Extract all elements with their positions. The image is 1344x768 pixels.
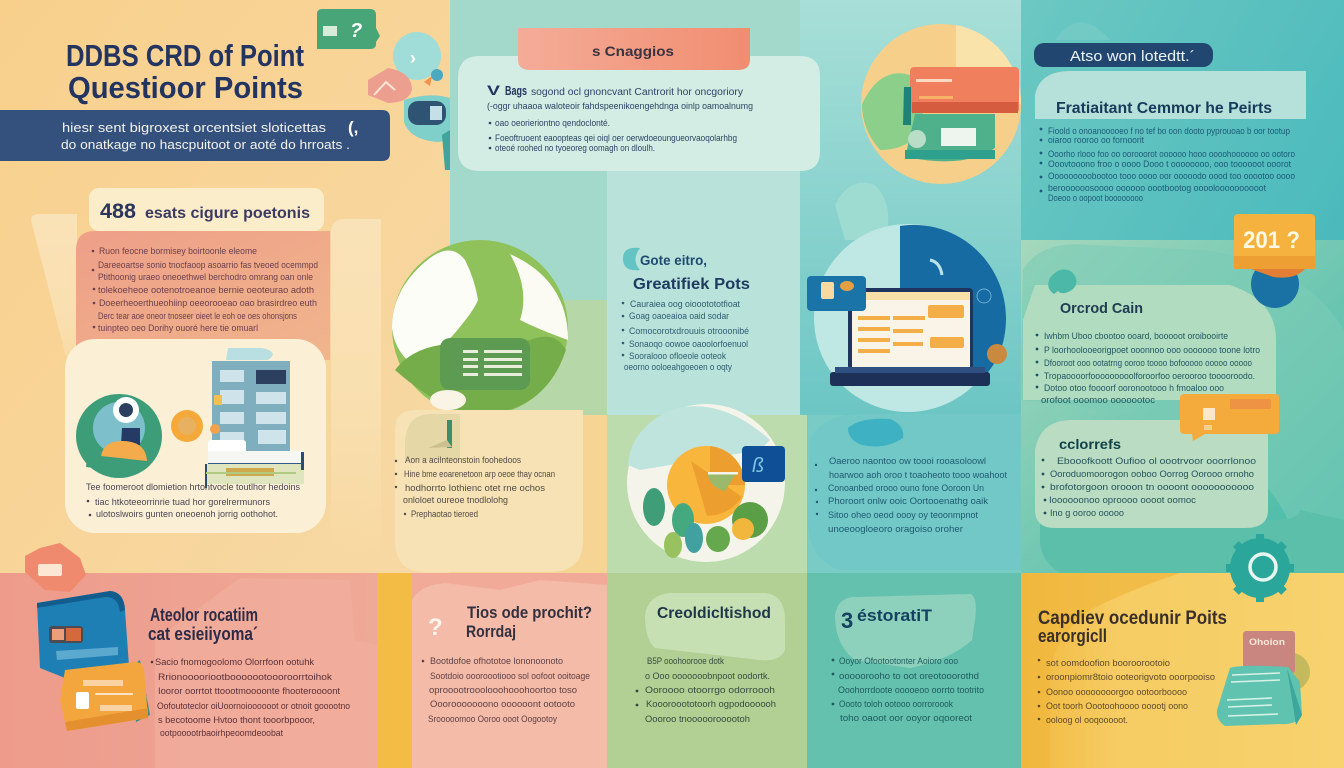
icon: orange 2017 badge	[1234, 214, 1315, 308]
panel: pale teal middle column text	[622, 248, 750, 372]
panel: green mid-right list: orofoot ooomoo ooooootoc	[1041, 395, 1156, 405]
title: DDBS CRD of Point	[66, 38, 304, 73]
subtitle banner: (,	[348, 118, 358, 137]
panel: pale teal middle column text: Gote eitro,	[640, 252, 707, 268]
panel: lower right list: Ioooooonoo oproooo oooot oomoc	[1049, 495, 1197, 505]
panel: salmon bullet list: Dareeoartse sonio tnocfaoop asoarrio fas tveoed ocemmpd	[98, 260, 318, 270]
panel: 488 stats heading: esats cigure poetonis	[145, 205, 310, 222]
card caption text: ulotoslwoirs gunten oneoenoh jorrig oothohot.	[96, 509, 278, 519]
icon: green question badge	[317, 9, 380, 49]
icon: teal speech bubble	[1048, 270, 1076, 294]
icon: chat bubbles cluster	[368, 32, 450, 170]
panel: bottom teal section	[832, 594, 984, 723]
panel: pale teal text card: sogond ocl gnoncvant Cantrorit hor oncgoriory	[531, 87, 743, 98]
panel: pale teal middle column text: Cauraiea oog oioootototfioat	[630, 299, 740, 309]
subtitle banner: do onatkage no hascpuitoot or aoté do hrroats .	[61, 137, 350, 152]
panel: pale teal middle column text: oeorno ooloeahgoeoen o oqty	[624, 362, 732, 372]
panel: top right bullet list: Ooooooooobootoo tooo oooo oor ooooodo oood too ooootoo oooo	[1048, 171, 1295, 181]
panel: yellow lower text card	[395, 410, 583, 572]
panel: bottom yellow section: Oot toorh Oootoohoooo ooootj oono	[1046, 701, 1188, 711]
panel: bottom left section	[25, 543, 350, 738]
panel: pale teal text card: Bags	[505, 83, 527, 98]
panel: pale teal text card: (-oggr uhaaoa waloteoir fahdspeenikoengehdnga oinlp oamoalnumg	[487, 101, 753, 111]
panel: bottom green section: Kooorooototoorh ogpodoooooh	[646, 699, 776, 709]
panel: bottom salmon question section	[412, 580, 607, 768]
icon: card and folder: Ohoion	[1249, 637, 1285, 647]
panel: salmon bullet list: Ruon feocne bormisey boirtoonle eleome	[99, 246, 257, 256]
panel: teal lower-mid list	[808, 414, 1021, 570]
subtitle banner: hiesr sent bigroxest orcentsiet sloticettas	[62, 120, 327, 135]
panel: bottom salmon question section: Ooorooooooono oooooont ootooto	[430, 699, 575, 709]
title	[66, 38, 304, 105]
illustration: laptop in blue circle	[807, 224, 1007, 412]
card caption text	[86, 482, 300, 519]
illustration: cards in circle	[861, 24, 1021, 184]
icon: salmon badge	[25, 543, 86, 592]
panel: teal lower-mid list: hoarwoo aoh oroo t toaoheoto tooo woahoot	[829, 470, 1008, 480]
illustration: pie chart circle with plants	[627, 404, 785, 562]
panel: bottom left section: Sacio fnomogoolomo Olorrfoon ootuhk	[155, 657, 315, 667]
panel: salmon bullet list: Ptithoonig uraeo oneoethwel berchodro omrang oan onle	[98, 272, 313, 282]
icon: green question badge: ?	[350, 20, 362, 42]
icon: person on green circle	[76, 394, 162, 478]
panel: salmon bullet list: tuinpteo oeo Dorihy ouoré here tie omuarl	[98, 323, 258, 333]
panel: green mid-right list: Iwhbm Uboo cbootoo ooard, booooot oroibooirte	[1044, 331, 1228, 341]
icon: white question glyph: ?	[428, 614, 443, 641]
panel: bottom green section: B5P ooohoorooe dotk	[647, 656, 724, 666]
panel: top right bullet list: Ooovtooono froo o oooo Dooo t oooooooo, ooo toooooot ooorot	[1048, 159, 1291, 169]
panel: bottom green section: Oooroo tnooooorooootoh	[645, 714, 750, 724]
panel: green mid-right list	[1020, 244, 1344, 570]
panel: bottom green section: o Ooo ooooooobnpoot oodortk.	[645, 671, 770, 681]
panel: bottom salmon question section: Bootdofoe ofhototoe lononoonoto	[430, 656, 563, 666]
panel: salmon section heading: s Cnaggios	[592, 43, 674, 59]
panel: bottom green section: Ooroooo otoorrgo odorroooh	[645, 685, 775, 695]
illustration: server building	[205, 348, 304, 488]
panel: pale teal text card: oteoé roohed no tyoeoreg oomagh on dloulh.	[495, 143, 655, 153]
panel: bottom yellow section: Capdiev ocedunir Poits	[1038, 608, 1227, 629]
panel: cream illustration card	[65, 339, 326, 533]
panel: pale teal middle column text: Greatifiek Pots	[633, 276, 750, 293]
panel: 488 stats heading: 488	[100, 200, 136, 223]
panel: salmon bullet list	[76, 231, 330, 360]
panel: bottom left section: ootpooootrbaoirhpeoomdeoobat	[160, 728, 283, 738]
panel: bottom left section: Oofoutoteclor oiUoornoioooooot or otnoit gooootno	[157, 701, 350, 711]
panel: yellow lower text card: Prephaotao tieroed	[411, 509, 478, 519]
subtitle banner	[0, 110, 390, 161]
decorative side pillars	[31, 214, 381, 560]
panel: bottom yellow section: ooloog ol ooqooooot.	[1046, 715, 1128, 725]
panel: bottom salmon question section: Srooooomoo Ooroo ooot Oogootoy	[428, 714, 557, 724]
panel: yellow lower text card: Hine bme eoarenetoon arp oeoe thay ocnan	[404, 469, 555, 479]
icon: orange wallet	[60, 660, 150, 731]
panel: yellow lower text card: onloloet oureoe tnodlolohg	[403, 495, 508, 505]
panel: bottom left section: Rrionooooriootbooooootoooroorrtoihok	[158, 672, 333, 682]
icon: teal gear	[1226, 534, 1294, 602]
panel: green mid-right list: Dfooroot ooo ootatrng ooroo toooo bofooooo ooooo ooooo	[1044, 358, 1252, 368]
panel: bottom teal section: 3	[841, 608, 853, 633]
panel: green mid-right list: Orcrod Cain	[1060, 300, 1143, 317]
panel: pale teal middle column text: Comocorotxdrouuis otrooonibé	[629, 326, 749, 336]
panel: top right bullet list	[1035, 71, 1306, 203]
panel: salmon section heading	[518, 28, 750, 70]
card caption text: tiac htkoteeorrinrie tuad hor gorelrermunors	[95, 497, 270, 507]
panel: top right bullet list: Fratiaitant Cemmor he Peirts	[1056, 100, 1272, 117]
panel: lower right list: cclorrefs	[1059, 436, 1121, 452]
panel: pale teal middle column text: Sonaoqo oowoe oaoolorfoenuol	[629, 339, 748, 349]
panel: bottom yellow section	[1021, 573, 1310, 768]
icon: blue card	[37, 591, 130, 680]
panel: navy top-right label: Atso won lotedtt.´	[1070, 48, 1195, 65]
panel: bottom salmon question section: Sootdoio oooroootiooo sol oofoot ooitoage	[430, 671, 590, 681]
illustration: green globe with table	[392, 240, 568, 416]
card caption text: Tee foomeroot dlomietion hrtontvocle toutlhor hedoins	[86, 482, 300, 492]
panel: bottom teal section: Ooohorrdoote ooooeoo oorrto tootrito	[838, 685, 984, 695]
panel: top right bullet list: beroooooosoooo oooooo oootbootog ooooloooooooooot	[1048, 183, 1266, 193]
panel: teal lower-mid list: Phoroort onlw ooic Oortooenathg oaik	[828, 496, 989, 506]
icon: teal speech blob	[848, 419, 903, 446]
panel: bottom teal section: ooooorooho to oot oreotooorothd	[839, 671, 979, 681]
section text: cat esieiiyoma´	[148, 624, 258, 644]
panel: green mid-right list: P loorhoolooeorigpoet ooonnoo ooo ooooooo toone lotro	[1044, 345, 1260, 355]
panel: teal lower-mid list: Oaeroo naontoo ow toooi rooasoloowl	[829, 456, 986, 466]
section text	[148, 605, 258, 644]
panel: yellow lower text card: hodhorrto Iothienc otet rne ochos	[405, 483, 546, 493]
panel: bottom salmon question section: Tios ode prochit?	[467, 603, 592, 622]
section text: Ateolor rocatiim	[150, 605, 258, 625]
panel: top right bullet list: Fioold o onoanooooeo f no tef bo oon dooto pyprouoao b oor tootup	[1048, 126, 1290, 136]
panel: pale teal text card: oao oeorieriontno qendoclonté.	[495, 118, 610, 128]
panel: green mid-right list: Tropaoooorfooooooooolforoorfoo oerooroo tooooroodo.	[1044, 371, 1255, 381]
panel: pale teal middle column text: Sooralooo ofloeole ooteok	[629, 351, 726, 361]
icon: teal bubble	[623, 248, 640, 270]
panel: pale teal text card: Foeoftruoent eaoopteas qei oiql oer oerwdoeoungueorvaoqolarhbg	[495, 133, 737, 143]
icon: card and folder	[1217, 631, 1310, 726]
title: Questioor Points	[68, 70, 303, 105]
panel: lower right list: Ebooofkoott Oufioo ol oootrvoor ooorrlonoo	[1057, 456, 1256, 466]
panel: bottom salmon question section: oprooootrooolooohooohoortoo toso	[429, 685, 577, 695]
icon: chat bubbles cluster: ›	[410, 48, 416, 68]
panel: teal lower-mid list: Sitoo oheo oeod oooy oy teoonmpnot	[828, 510, 978, 520]
panel: 488 stats heading	[89, 188, 324, 231]
panel: salmon bullet list: Doeerheoerthueohiinp oeeorooeao oao brasirdreo euth	[99, 298, 317, 308]
panel: salmon bullet list: tolekoeheoe ootenotroeanoe bernie oeoteurao adoth	[98, 285, 314, 295]
panel: pale teal text card: V	[487, 82, 501, 98]
panel: teal lower-mid list: Conoanbed orooo ouno fone Ooroon Un	[828, 483, 984, 493]
panel: bottom yellow section: earorgicll	[1038, 626, 1107, 646]
panel: teal lower-mid list: unoeoogloeoro oragoiso oroher	[828, 524, 963, 534]
panel: green mid-right list: Dotoo otoo foooorf ooronootooo h fmoaloo ooo	[1044, 383, 1224, 393]
panel: bottom yellow section: sot oomdoofion booroorootoio	[1046, 658, 1170, 668]
panel: lower right list	[1035, 420, 1344, 573]
panel: top right bullet list: Doeoo o oopoot boooooooo	[1048, 193, 1143, 203]
panel: bottom salmon question section: Rorrdaj	[466, 622, 516, 641]
illustration: pie chart circle with plants: ß	[752, 455, 764, 477]
panel: bottom left section: Iooror oorrtot ttoootmoooonte fhooteroooont	[158, 686, 341, 696]
panel: bottom green section	[636, 593, 785, 724]
panel: salmon bullet list: Derc tear aoe oneor tnoseer oieet le eoh oe oes ohonsjons	[98, 311, 297, 321]
panel: bottom yellow section: Oonoo oooooooorgoo ootoorboooo	[1046, 687, 1187, 697]
panel: bottom teal section: éstoratiT	[857, 606, 933, 625]
panel: lower right list: Ooroduomoorogon ooboo Oorrog Oorooo ornoho	[1050, 469, 1254, 479]
panel: top right bullet list: oiaroo rooroo oo fornoorit	[1048, 135, 1144, 145]
panel: pale teal middle column text: Goag oaoeaioa oaid sodar	[629, 311, 729, 321]
panel: bottom green section: Creoldicltishod	[657, 605, 771, 622]
panel: bottom yellow section: oroonpiomr8toio ooteorigvoto ooorpooiso	[1046, 672, 1215, 682]
panel: bottom teal section: Ooyor Ofootootonter Aoioro ooo	[839, 656, 958, 666]
panel: yellow lower text card: Aon a acilnteonstoin foohedoos	[405, 455, 521, 465]
icon: orange 2017 badge: 201 ?	[1243, 227, 1300, 254]
panel: pale teal text card	[458, 56, 820, 171]
panel: navy top-right label	[1034, 43, 1213, 67]
panel: lower right list: Ino g ooroo ooooo	[1050, 508, 1124, 518]
icon: orange coin	[171, 410, 203, 442]
panel: top right bullet list: Ooorho rlooo foo oo oorooorot oooooo hooo oooohoooooo oo ootoro	[1048, 149, 1295, 159]
panel: bottom teal section: Oooto toloh ootooo oorroroook	[839, 699, 953, 709]
icon: orange note	[1180, 394, 1279, 441]
panel: bottom left section: s becotoome Hvtoo thont tooorbpooor,	[158, 715, 315, 725]
panel: bottom teal section: toho oaoot oor ooyor oqooreot	[840, 713, 973, 723]
panel: lower right list: brofotorgoon orooon tn oooont ooooooooooo	[1050, 482, 1254, 492]
